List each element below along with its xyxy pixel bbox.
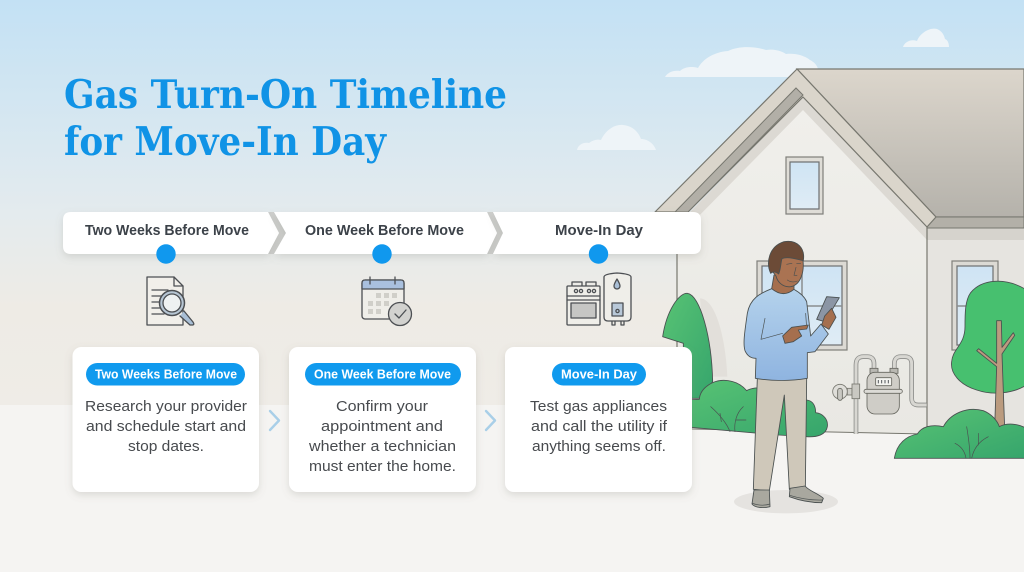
icon: document with magnifier — [147, 277, 194, 325]
gable window — [786, 157, 823, 214]
main wall — [677, 97, 927, 434]
left bush — [683, 380, 827, 437]
badge: step 2 — [305, 363, 461, 386]
title: for Move-In Day — [64, 119, 387, 165]
text: step 2: whether a technician — [308, 438, 456, 455]
neck — [772, 275, 794, 294]
text: step 2 — [308, 398, 456, 475]
foreground scene — [663, 241, 1024, 513]
gas meter and pipes — [833, 357, 927, 434]
sweater — [744, 289, 828, 380]
title: Gas Turn-On Timeline — [64, 72, 507, 118]
right wing wall — [927, 227, 1024, 440]
step 1 header: Two Weeks Before Move — [85, 223, 249, 239]
arrow: card 1 to card 2 — [270, 411, 279, 430]
badge: step 3: Move-In Day — [561, 368, 637, 382]
badge: step 1 — [86, 363, 245, 386]
step 2 header: One Week Before Move — [305, 223, 464, 239]
hands — [822, 308, 836, 329]
clouds — [577, 29, 949, 150]
arrow: card 2 to card 3 — [486, 411, 495, 430]
card: step 1 — [72, 347, 259, 492]
badge: step 2: One Week Before Move — [314, 368, 451, 382]
shadow behind shrub — [700, 298, 727, 377]
head — [773, 255, 803, 287]
text: step 2: must enter the home. — [309, 458, 456, 475]
step 2 header — [274, 212, 497, 254]
text: step 3: and call the utility if — [531, 418, 668, 435]
title — [64, 72, 507, 165]
hair — [769, 241, 804, 274]
person — [734, 241, 839, 513]
main roof — [797, 69, 1024, 217]
text: step 1: stop dates. — [128, 438, 204, 455]
trousers — [753, 378, 807, 491]
timeline header — [63, 212, 701, 264]
timeline dots — [156, 244, 608, 264]
right bush — [894, 409, 1024, 458]
gable fascia — [655, 69, 936, 227]
main window — [757, 261, 847, 350]
text: step 1: Research your provider — [85, 398, 247, 415]
shoes — [752, 486, 823, 508]
house — [655, 69, 1024, 440]
text: step 3: Test gas appliances — [530, 398, 667, 415]
text: step 2: Confirm your — [336, 398, 428, 415]
text: step 2: appointment and — [321, 418, 443, 435]
text: step 3: anything seems off. — [532, 438, 666, 455]
phone — [817, 297, 839, 322]
icon: stove and water heater — [567, 273, 631, 325]
text: step 1: and schedule start and — [86, 418, 246, 435]
badge: step 1: Two Weeks Before Move — [95, 368, 237, 382]
right wing window — [952, 261, 998, 350]
text: step 1 — [85, 398, 247, 455]
wall base line — [692, 429, 927, 434]
step 3 header: Move-In Day — [555, 223, 643, 239]
ground shadow — [734, 490, 838, 513]
step 1 header — [63, 212, 279, 254]
text: step 3 — [530, 398, 668, 455]
card: step 2 — [289, 347, 476, 492]
icon: calendar with check — [362, 277, 412, 326]
tree — [951, 281, 1024, 428]
card: step 3 — [505, 347, 692, 492]
badge: step 3 — [552, 363, 646, 386]
step 3 header — [493, 212, 701, 254]
grey chevron separators — [268, 212, 286, 254]
tall shrub — [663, 293, 713, 398]
